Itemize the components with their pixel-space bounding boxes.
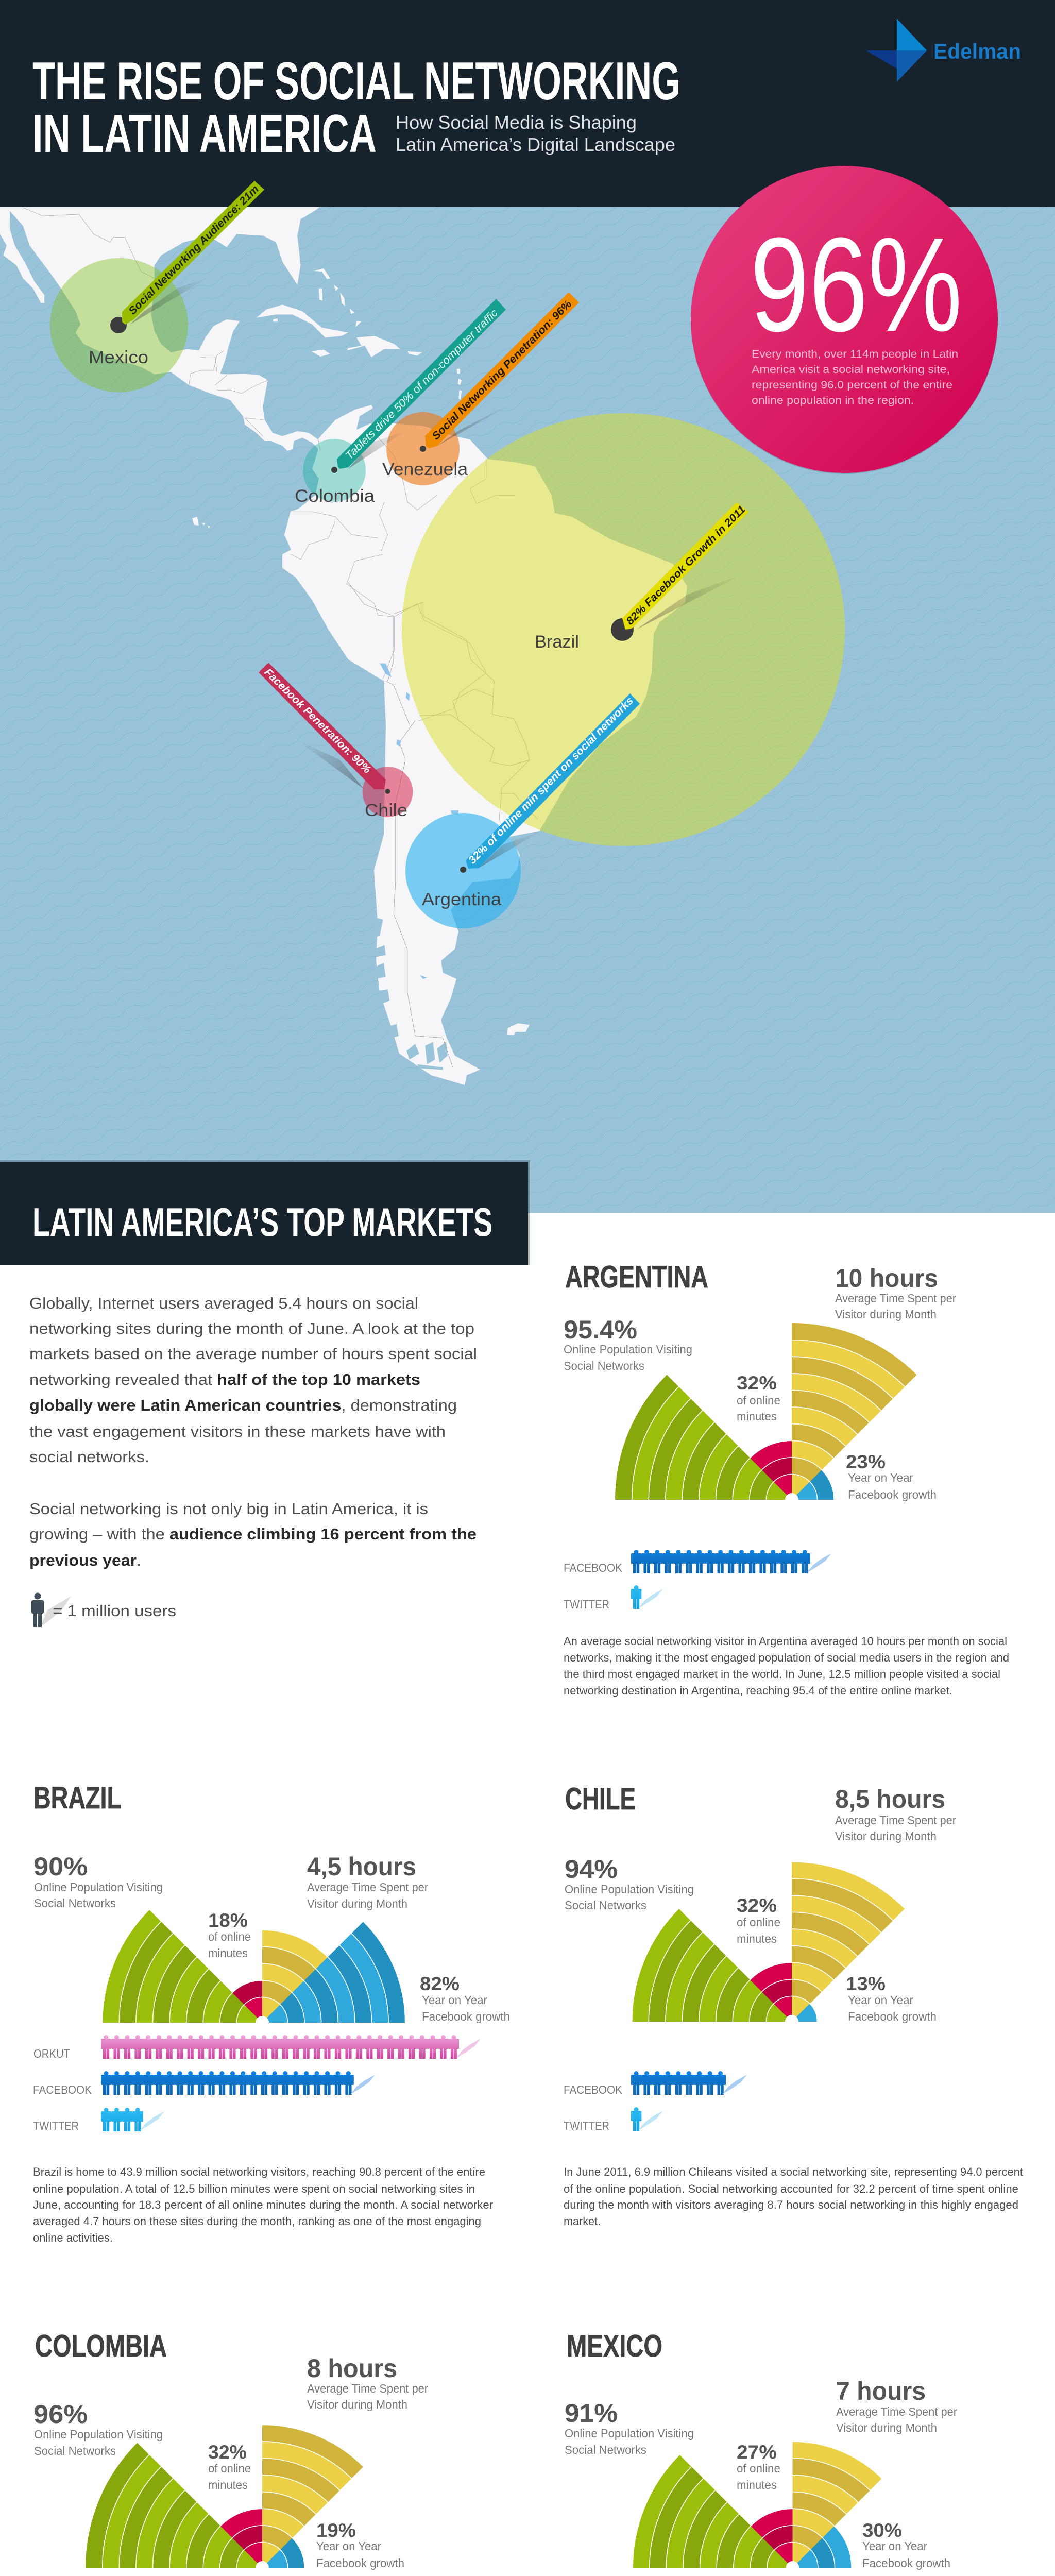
Edelman logo: Edelman bbox=[933, 39, 1021, 63]
stat: online minutes: of online bbox=[737, 1394, 780, 1407]
stat: hours bbox=[836, 2377, 957, 2434]
country labels: Argentina bbox=[422, 890, 501, 909]
section heading: Latin America's top markets bbox=[0, 1160, 530, 1265]
subtitle bbox=[396, 112, 675, 155]
stat: Facebook growth: 13% bbox=[846, 1973, 886, 1994]
panel: Mexico bbox=[564, 2329, 1019, 2576]
pictogram: Facebook bbox=[564, 2071, 747, 2096]
tag: Brazil: 82% Facebook Growth in 2011 bbox=[624, 503, 748, 628]
stat: hours: 10 hours bbox=[835, 1264, 938, 1293]
radial chart bbox=[103, 1863, 422, 2182]
stat: hours: 8,5 hours bbox=[835, 1785, 945, 1814]
callout text: online population in the region. bbox=[752, 395, 914, 406]
intro text: the vast engagement visitors in these markets have with bbox=[29, 1422, 446, 1440]
bubble: Argentina bbox=[405, 813, 521, 928]
title: IN LATIN AMERICA bbox=[32, 104, 377, 164]
stat: Facebook growth bbox=[846, 1451, 937, 1501]
bubble: Colombia bbox=[303, 439, 366, 502]
body text: Brazil is home to 43.9 million social networking visitors, reaching 90.8 percent of the entire bbox=[33, 2165, 485, 2178]
heading: MEXICO bbox=[567, 2329, 662, 2363]
Edelman logo bbox=[866, 19, 1021, 82]
stat: online minutes bbox=[737, 1895, 780, 1945]
pictogram: Facebook bbox=[33, 2071, 375, 2096]
stat: penetration: Social Networks bbox=[565, 1899, 646, 1912]
stat: Facebook growth: Facebook growth bbox=[848, 1488, 937, 1501]
panel: Chile bbox=[564, 1782, 1024, 2228]
stat: Facebook growth: Year on Year bbox=[848, 1993, 913, 2007]
bubble: Venezuela bbox=[386, 412, 460, 485]
stat: online minutes: of online bbox=[737, 1916, 780, 1929]
intro text bbox=[29, 1294, 477, 1569]
stat: penetration: Social Networks bbox=[565, 2443, 646, 2456]
southern fjords bbox=[375, 918, 448, 1070]
title bbox=[32, 52, 680, 164]
country labels: Brazil bbox=[535, 632, 579, 652]
stat: penetration bbox=[565, 1855, 694, 1912]
stat: online minutes bbox=[208, 1910, 251, 1960]
country labels: Chile bbox=[365, 801, 407, 820]
stat: online minutes: minutes bbox=[208, 2478, 248, 2492]
country labels: Mexico bbox=[89, 348, 148, 367]
stat: penetration: 96% bbox=[33, 2400, 88, 2429]
stat: online minutes: 32% bbox=[208, 2442, 247, 2463]
radial chart bbox=[86, 2408, 422, 2576]
stat: online minutes: of online bbox=[208, 2462, 251, 2475]
pictogram: Twitter: TWITTER bbox=[564, 1598, 609, 1611]
country borders bbox=[23, 208, 537, 1067]
stat: online minutes: minutes bbox=[208, 1946, 248, 1960]
stat: Facebook growth: 82% bbox=[420, 1973, 460, 1994]
stat: hours: 7 hours bbox=[836, 2377, 926, 2405]
body text bbox=[33, 2165, 493, 2244]
pictogram: Twitter bbox=[33, 2108, 164, 2132]
panel: map bbox=[0, 206, 1055, 1213]
stat: penetration: Social Networks bbox=[34, 1896, 116, 1910]
stat: Facebook growth: Year on Year bbox=[862, 2539, 927, 2553]
stat: online minutes: minutes bbox=[737, 1410, 777, 1423]
stat: penetration: Online Population Visiting bbox=[34, 1880, 163, 1894]
stat: hours: Visitor during Month bbox=[307, 2398, 407, 2411]
callout text: America visit a social networking site, bbox=[752, 364, 950, 376]
stat: hours: Average Time Spent per bbox=[835, 1292, 956, 1305]
stat: Facebook growth: Year on Year bbox=[422, 1993, 487, 2007]
stat: hours: Average Time Spent per bbox=[307, 2382, 428, 2395]
pictogram: Orkut bbox=[33, 2035, 481, 2060]
intro text: Globally, Internet users averaged 5.4 hours on social bbox=[29, 1294, 418, 1312]
body text: In June 2011, 6.9 million Chileans visited a social networking site, representing 94.0 percent bbox=[564, 2165, 1024, 2178]
stat: hours: Average Time Spent per bbox=[835, 1814, 956, 1827]
pictogram: Facebook: FACEBOOK bbox=[33, 2083, 92, 2096]
section heading: Latin America's top markets: LATIN AMERICA’S TOP MARKETS bbox=[32, 1199, 492, 1245]
stat: penetration: Online Population Visiting bbox=[565, 1883, 694, 1896]
legend: one person equals 1 million users: = 1 million users bbox=[53, 1602, 176, 1620]
heading: BRAZIL bbox=[33, 1781, 122, 1815]
body text: June, accounting for 18.3 percent of all online minutes during the month. A social networker bbox=[33, 2198, 493, 2211]
callout text: Every month, over 114m people in Latin bbox=[752, 348, 958, 360]
tag: Chile: Facebook Penetration: 90% bbox=[262, 666, 373, 776]
body text: averaged 4.7 hours on these sites during the month, ranking as one of the most engaging bbox=[33, 2215, 481, 2228]
stat: penetration: Social Networks bbox=[34, 2444, 116, 2458]
callout: 96% circle bbox=[691, 166, 998, 474]
stat: online minutes: minutes bbox=[737, 1932, 777, 1945]
radial chart bbox=[615, 1323, 951, 1659]
stat: hours: Visitor during Month bbox=[835, 1308, 937, 1321]
stat: hours: Visitor during Month bbox=[835, 1829, 937, 1843]
tag: Colombia: Tablets drive 50% of non-computer traffic bbox=[343, 307, 500, 462]
panel: Argentina bbox=[564, 1260, 1009, 1697]
stat: Facebook growth: Facebook growth bbox=[848, 2010, 937, 2023]
stat: online minutes bbox=[208, 2442, 251, 2492]
stat: hours bbox=[307, 2354, 428, 2411]
header band bbox=[0, 0, 1055, 207]
stat: penetration: 95.4% bbox=[564, 1315, 637, 1344]
pictogram: Orkut: ORKUT bbox=[33, 2047, 70, 2060]
intro text: networking sites during the month of June. A look at the top bbox=[29, 1319, 474, 1337]
stat: penetration bbox=[33, 2400, 163, 2458]
stat: Facebook growth: Year on Year bbox=[316, 2539, 381, 2553]
bubble: Brazil bbox=[402, 413, 845, 846]
pictogram: Twitter: TWITTER bbox=[564, 2119, 609, 2132]
stat: Facebook growth: Facebook growth bbox=[862, 2556, 950, 2570]
title: THE RISE OF SOCIAL NETWORKING bbox=[32, 52, 680, 111]
pictogram: Facebook: FACEBOOK bbox=[564, 1561, 623, 1574]
callout: 96% circle: 96% bbox=[750, 210, 962, 360]
stat: hours: 8 hours bbox=[307, 2354, 397, 2383]
tag: Argentina: 32% of online min spent on social networks bbox=[466, 695, 636, 867]
stat: Facebook growth: 30% bbox=[862, 2520, 902, 2541]
country labels bbox=[89, 348, 579, 909]
pictogram: Facebook bbox=[564, 1550, 831, 1574]
intro text: markets based on the average number of hours spent social bbox=[29, 1345, 477, 1363]
body text: during the month with visitors averaging 8.7 hours social networking in this highly engaged bbox=[564, 2198, 1018, 2211]
subtitle: Latin America’s Digital Landscape bbox=[396, 134, 675, 155]
legend: one person equals 1 million users bbox=[31, 1593, 176, 1627]
country labels: Venezuela bbox=[382, 460, 468, 479]
body text: market. bbox=[564, 2215, 601, 2228]
stat: penetration: 94% bbox=[565, 1855, 618, 1884]
stat: Facebook growth: 23% bbox=[846, 1451, 886, 1472]
country labels: Colombia bbox=[295, 486, 375, 506]
heading: ARGENTINA bbox=[565, 1260, 708, 1294]
sea bbox=[0, 206, 1055, 1213]
stat: penetration bbox=[565, 2399, 694, 2456]
pictogram: Twitter bbox=[564, 2107, 663, 2132]
stat: online minutes: 27% bbox=[737, 2442, 777, 2463]
stat: Facebook growth bbox=[316, 2520, 404, 2570]
stat: penetration bbox=[33, 1852, 163, 1910]
body text: online population. A total of 12.5 billion minutes were spent on social networking sites in bbox=[33, 2182, 475, 2195]
pins bbox=[110, 317, 634, 873]
stat: hours bbox=[835, 1785, 956, 1843]
body text: online activities. bbox=[33, 2231, 113, 2244]
stat: online minutes: minutes bbox=[737, 2478, 777, 2492]
stat: penetration: 90% bbox=[33, 1852, 88, 1881]
intro text: Social networking is not only big in Latin America, it is bbox=[29, 1500, 428, 1518]
land masses bbox=[0, 206, 687, 1085]
stat: online minutes: of online bbox=[737, 2462, 780, 2475]
stat: hours: Visitor during Month bbox=[836, 2421, 937, 2434]
panel: Colombia bbox=[32, 2329, 488, 2576]
stat: Facebook growth: 19% bbox=[316, 2520, 356, 2541]
bubble: Mexico bbox=[50, 258, 188, 392]
stat: online minutes: of online bbox=[208, 1930, 251, 1943]
stat: Facebook growth: Facebook growth bbox=[316, 2556, 404, 2570]
body text: networks, making it the most engaged population of social media users in the region and bbox=[564, 1651, 1009, 1664]
intro text: previous year. bbox=[29, 1551, 141, 1569]
body text bbox=[564, 1635, 1009, 1697]
lakes and rivers bbox=[380, 663, 458, 979]
pictogram: Facebook: FACEBOOK bbox=[564, 2083, 623, 2096]
callout text: representing 96.0 percent of the entire bbox=[752, 379, 952, 391]
bubble: Chile bbox=[363, 767, 413, 817]
pictogram: Twitter bbox=[564, 1585, 663, 1611]
stat: penetration: Online Population Visiting bbox=[565, 2427, 694, 2440]
stat: hours: Average Time Spent per bbox=[307, 1880, 428, 1894]
ribbon shadows bbox=[130, 277, 742, 868]
subtitle: How Social Media is Shaping bbox=[396, 112, 637, 133]
stat: online minutes bbox=[737, 1372, 780, 1423]
stat: Facebook growth: Year on Year bbox=[848, 1471, 913, 1484]
radial chart bbox=[632, 1862, 951, 2181]
tag: Venezuela: Social Networking Penetration: 96% bbox=[430, 298, 574, 443]
stat: online minutes: 18% bbox=[208, 1910, 248, 1931]
stat: Facebook growth: Facebook growth bbox=[422, 2010, 510, 2023]
intro text: growing – with the audience climbing 16 percent from the bbox=[29, 1525, 477, 1543]
callout text bbox=[752, 348, 958, 406]
stat: penetration: 91% bbox=[565, 2399, 618, 2428]
body text: networking destination in Argentina, reaching 95.4 of the entire online market. bbox=[564, 1684, 952, 1697]
stat: online minutes bbox=[737, 2442, 780, 2492]
stat: penetration: Online Population Visiting bbox=[34, 2428, 163, 2441]
intro text: globally were Latin American countries , demonstrating bbox=[29, 1396, 457, 1414]
stat: online minutes: 32% bbox=[737, 1895, 777, 1916]
radial chart bbox=[633, 2408, 952, 2576]
heading: COLOMBIA bbox=[35, 2329, 167, 2363]
stat: penetration: Online Population Visiting bbox=[564, 1343, 692, 1356]
stat: Facebook growth bbox=[420, 1973, 510, 2023]
stat: hours bbox=[307, 1852, 428, 1910]
stat: hours: Average Time Spent per bbox=[836, 2405, 957, 2418]
intro text: networking revealed that half of the top 10 markets bbox=[29, 1370, 420, 1388]
stat: Facebook growth bbox=[862, 2520, 950, 2570]
body text: of the online population. Social networking accounted for 32.2 percent of time spent online bbox=[564, 2182, 1018, 2195]
heading: CHILE bbox=[565, 1782, 636, 1816]
panel: Brazil bbox=[33, 1781, 510, 2244]
stat: penetration: Social Networks bbox=[564, 1359, 644, 1372]
body text: the third most engaged market in the world. In June, 12.5 million people visited a social bbox=[564, 1668, 1000, 1681]
tag: Mexico: Social Networking Audience: 21m bbox=[126, 183, 261, 317]
stat: Facebook growth bbox=[846, 1973, 937, 2023]
stat: online minutes: 32% bbox=[737, 1372, 777, 1394]
body text: An average social networking visitor in Argentina averaged 10 hours per month on social bbox=[564, 1635, 1007, 1648]
stat: hours: Visitor during Month bbox=[307, 1897, 407, 1910]
stat: hours bbox=[835, 1264, 956, 1321]
body text bbox=[564, 2165, 1024, 2228]
stat: penetration bbox=[564, 1315, 692, 1372]
intro text: social networks. bbox=[29, 1448, 149, 1466]
pictogram: Twitter: TWITTER bbox=[33, 2119, 79, 2132]
stat: hours: 4,5 hours bbox=[307, 1852, 416, 1881]
